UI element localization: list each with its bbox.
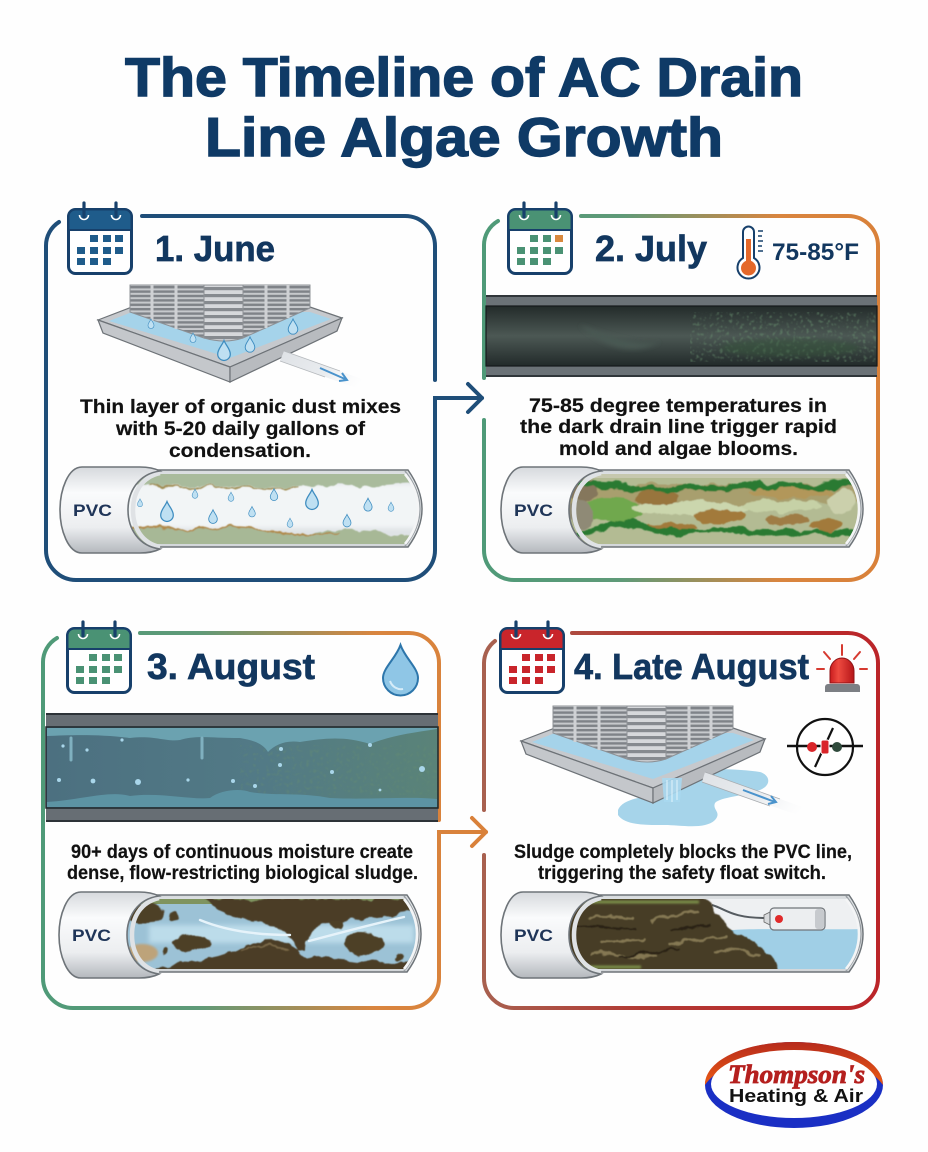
heading: July: 2. July bbox=[595, 228, 707, 269]
text: July description: mold and algae blooms. bbox=[559, 438, 798, 460]
arrow: June to July bbox=[468, 384, 482, 412]
label: PVC: PVC bbox=[514, 501, 553, 520]
text: July description: 75-85 degree temperatures in bbox=[529, 395, 827, 417]
logo: Thompson's Heating & Air: Heating & Air bbox=[729, 1086, 863, 1106]
heading: August: 3. August bbox=[147, 646, 315, 687]
illustration: drain line with moisture bbox=[46, 713, 438, 822]
text: July description: the dark drain line trigger rapid bbox=[520, 416, 837, 438]
illustration: PVC pipe fully blocked with float switch bbox=[501, 892, 866, 978]
text: June description: with 5-20 daily gallons of bbox=[115, 418, 366, 440]
panel 2: July bbox=[484, 203, 878, 580]
panel 2 border bbox=[484, 216, 878, 580]
panel 1: June bbox=[46, 203, 482, 580]
text: June description: condensation. bbox=[169, 440, 311, 462]
text: July description bbox=[520, 395, 837, 460]
label: PVC: PVC bbox=[72, 926, 111, 945]
panel 1 border bbox=[46, 216, 482, 580]
title: Line Algae Growth bbox=[205, 106, 723, 168]
text: August description: 90+ days of continuous moisture create bbox=[71, 841, 413, 863]
icon: calendar June bbox=[68, 203, 132, 274]
icon: float switch symbol bbox=[787, 719, 863, 775]
text: Late August description: triggering the safety float switch. bbox=[538, 862, 826, 884]
icon: calendar Late August bbox=[500, 622, 564, 692]
panel 3: August bbox=[43, 622, 486, 1008]
text: June description: Thin layer of organic dust mixes bbox=[80, 396, 401, 418]
title: The Timeline of AC Drain bbox=[125, 46, 803, 108]
illustration: PVC pipe with thin film and droplets bbox=[60, 467, 425, 553]
illustration: PVC pipe with algae bloom bbox=[501, 467, 866, 553]
illustration: AC unit with drip pan bbox=[98, 285, 387, 390]
text: August description bbox=[67, 841, 418, 884]
text: June description bbox=[80, 396, 401, 462]
label: PVC: PVC bbox=[73, 501, 112, 520]
logo: Thompson's Heating & Air bbox=[705, 1042, 883, 1128]
text: Late August description: Sludge completely blocks the PVC line, bbox=[514, 841, 852, 863]
illustration: PVC pipe with sludge bbox=[59, 892, 424, 978]
illustration: dark drain line with early growth bbox=[486, 295, 877, 377]
illustration: overflowing AC unit and puddle bbox=[521, 706, 833, 826]
panel 4 border bbox=[484, 633, 878, 1008]
heading: June: 1. June bbox=[155, 228, 275, 269]
text: August description: dense, flow-restricting biological sludge. bbox=[67, 862, 418, 884]
title bbox=[125, 46, 803, 168]
label: temperature range: 75-85°F bbox=[772, 239, 859, 266]
label: PVC: PVC bbox=[514, 926, 553, 945]
panel 3 border bbox=[43, 633, 486, 1008]
icon: calendar July bbox=[508, 203, 572, 274]
arrow: August to Late August bbox=[472, 818, 486, 846]
icon: alarm light bbox=[817, 645, 867, 692]
icon: water drop bbox=[383, 645, 418, 696]
icon: thermometer bbox=[738, 227, 763, 279]
panel 4: Late August bbox=[484, 622, 878, 1008]
heading: Late August: 4. Late August bbox=[574, 646, 809, 687]
text: Late August description bbox=[514, 841, 852, 884]
logo: Thompson's Heating & Air: Thompson's bbox=[728, 1060, 865, 1089]
icon: calendar August bbox=[68, 622, 130, 692]
